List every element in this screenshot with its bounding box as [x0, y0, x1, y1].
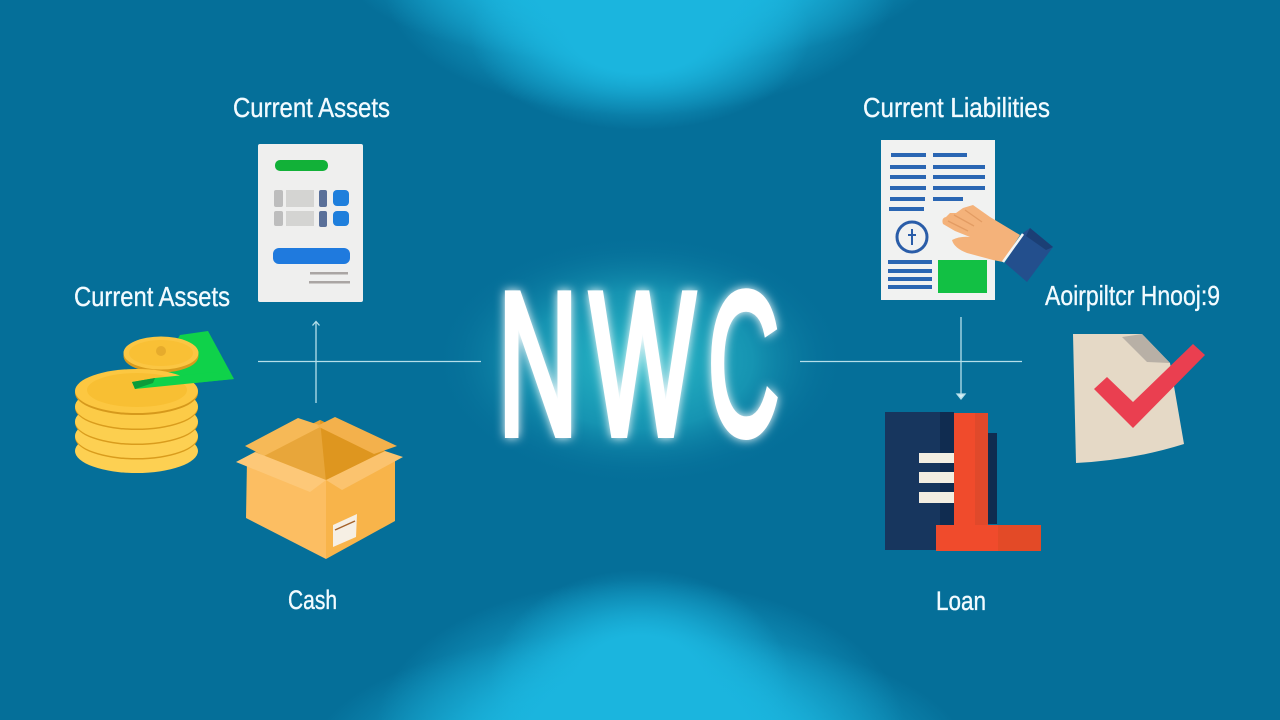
label: Cash: Cash — [288, 585, 337, 615]
heading: Current Assets top: Current Assets — [233, 92, 390, 123]
icon: balance document — [258, 144, 363, 302]
label: Loan: Loan — [936, 586, 986, 616]
title: NWC: W — [590, 251, 695, 478]
icon: loan book and letter — [885, 412, 1041, 551]
icon: coins and banknote — [75, 331, 234, 473]
label: garbled right caption: Aoirpiltcr Hnooj:9 — [1045, 280, 1220, 311]
connector lines: liabilities — [800, 317, 1022, 399]
connector lines: assets — [258, 322, 481, 403]
heading: Current Liabilities: Current Liabilities — [863, 92, 1050, 123]
icon: document with hand — [881, 140, 1053, 300]
title: NWC: N — [498, 251, 578, 478]
icon: paper with red check — [1073, 334, 1205, 463]
icon: open cardboard box — [236, 417, 403, 559]
text: C — [708, 251, 779, 478]
heading: Current Assets left: Current Assets — [74, 281, 230, 312]
